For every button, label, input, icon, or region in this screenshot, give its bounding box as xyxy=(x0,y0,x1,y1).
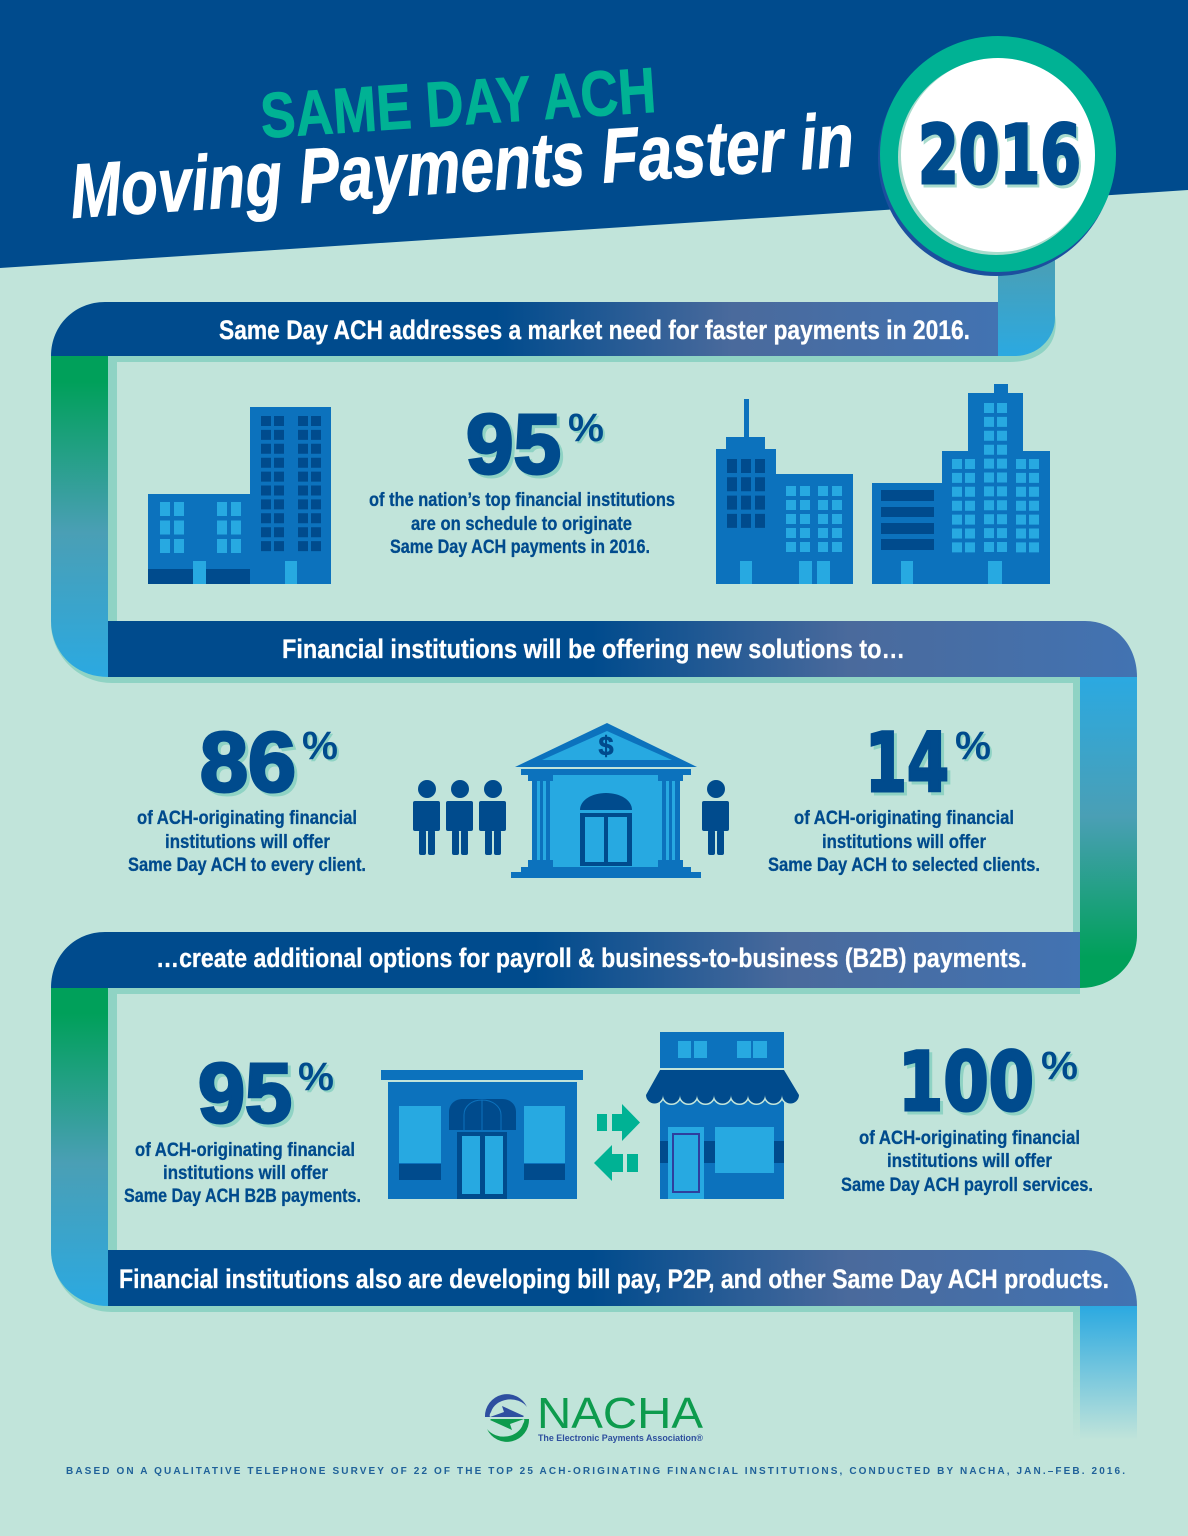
stat: 100 percent payroll services: Same Day ACH payroll services. xyxy=(841,1174,1093,1196)
stat: 100 percent payroll services: % xyxy=(1041,1044,1078,1088)
stat: 14 percent selected clients: of ACH-originating financial xyxy=(794,807,1014,829)
ribbon 1 left drop xyxy=(51,356,108,677)
icon: right storefront with awning xyxy=(646,1032,799,1199)
icon: three people xyxy=(413,780,506,855)
logo wordmark: NACHA xyxy=(537,1389,704,1438)
icon: single person xyxy=(702,780,729,855)
ribbon 4 tail xyxy=(1080,1306,1137,1440)
logo mark xyxy=(485,1394,529,1442)
stat: 95 percent B2B payments: % xyxy=(298,1055,334,1099)
stat: 14 percent selected clients xyxy=(768,717,1040,876)
stat: 95 percent top institutions: % xyxy=(568,406,604,450)
icon: left office buildings xyxy=(148,407,331,584)
bank dollar sign: $ xyxy=(598,731,614,761)
icon: left storefront xyxy=(381,1070,583,1199)
stat: 14 percent selected clients: % xyxy=(955,724,991,768)
stat: 100 percent payroll services: of ACH-originating financial xyxy=(859,1127,1080,1149)
stat: 100 percent payroll services: institutions will offer xyxy=(887,1150,1052,1172)
stat: 14 percent selected clients: 14 xyxy=(865,717,949,811)
stat: 95 percent B2B payments: 95 xyxy=(198,1046,292,1140)
ribbon 2 text: Financial institutions will be offering new solutions to… xyxy=(282,634,905,664)
ribbon path xyxy=(51,260,1137,1440)
stat: 86 percent every client: of ACH-originating financial xyxy=(137,807,357,829)
NACHA logo xyxy=(485,1389,704,1444)
ribbon 2 right drop xyxy=(1080,677,1137,988)
title: same day ach: SAME DAY ACH xyxy=(258,54,658,152)
stat: 86 percent every client: institutions will offer xyxy=(165,831,330,853)
icon: right skyscraper xyxy=(872,384,1050,584)
ribbon 1 connector xyxy=(998,260,1055,356)
ribbon 2 xyxy=(108,621,1137,677)
logo tagline: The Electronic Payments Association® xyxy=(538,1433,703,1444)
icon: bank building xyxy=(511,723,701,878)
stat: 86 percent every client: Same Day ACH to every client. xyxy=(128,854,366,876)
stat: 100 percent payroll services xyxy=(841,1036,1093,1196)
stat: 95 percent B2B payments: institutions will offer xyxy=(163,1162,328,1184)
icon: center tower building xyxy=(716,399,853,584)
stat: 95 percent top institutions xyxy=(369,397,675,558)
stat: 95 percent top institutions: 95 xyxy=(466,397,561,491)
stat: 86 percent every client: % xyxy=(302,724,338,768)
header band xyxy=(0,0,1188,268)
stat: 95 percent top institutions: of the nation’s top financial institutions xyxy=(369,489,675,511)
icon: exchange arrows xyxy=(594,1104,640,1181)
stat: 100 percent payroll services: 100 xyxy=(898,1036,1034,1130)
ribbon 1 text: Same Day ACH addresses a market need for faster payments in 2016. xyxy=(219,315,970,345)
footnote: BASED ON A QUALITATIVE TELEPHONE SURVEY OF 22 OF THE TOP 25 ACH-ORIGINATING FINANCIAL INSTITUTIONS, CONDUCTED BY NACHA, JAN.–FEB. 2016. xyxy=(66,1466,1125,1477)
stat: 95 percent B2B payments: Same Day ACH B2B payments. xyxy=(124,1185,361,1207)
stat: 14 percent selected clients: Same Day ACH to selected clients. xyxy=(768,854,1040,876)
stat: 86 percent every client: 86 xyxy=(200,715,296,809)
title xyxy=(67,54,856,235)
stat: 95 percent top institutions: Same Day ACH payments in 2016. xyxy=(390,536,650,558)
ribbon 4 xyxy=(108,1250,1137,1306)
stat: 95 percent B2B payments xyxy=(124,1046,361,1207)
ribbon shadows xyxy=(51,315,1080,1440)
ribbon 3 text: …create additional options for payroll & business-to-business (B2B) payments. xyxy=(156,943,1027,973)
stat: 14 percent selected clients: institutions will offer xyxy=(822,831,986,853)
stat: 86 percent every client xyxy=(128,715,366,876)
title: moving payments faster in: Moving Payments Faster in xyxy=(67,97,856,235)
stat: 95 percent top institutions: are on schedule to originate xyxy=(411,513,632,535)
year badge xyxy=(878,36,1116,276)
ribbon 3 xyxy=(51,932,1080,988)
badge year: 2016 xyxy=(918,109,1081,203)
ribbon 1 xyxy=(51,302,998,356)
stat: 95 percent B2B payments: of ACH-originating financial xyxy=(135,1139,355,1161)
ribbon 3 left drop xyxy=(51,988,108,1306)
